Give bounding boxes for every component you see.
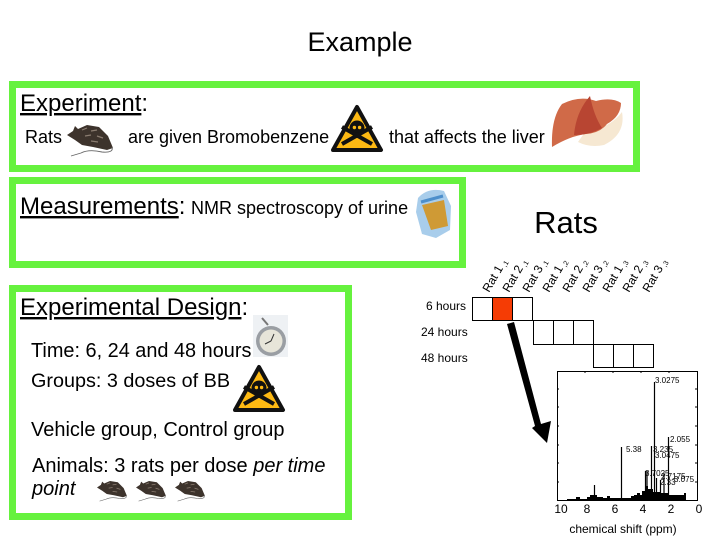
rat column labels: ,1 [541,260,551,270]
text: vehicle control: Vehicle group, Control group [31,419,284,441]
row labels: 24 hours [421,325,468,339]
peak labels: 5.38 [626,445,642,454]
x axis ticks: 10 [554,502,568,516]
text: affects the liver: that affects the liver [389,127,545,147]
text: time: Time: 6, 24 and 48 hours [31,340,251,362]
heading: experimental design: Experimental Design: [20,294,248,321]
peak labels: 2.33 [660,478,676,487]
icon: urine glass [416,190,451,238]
icon: liver [552,96,623,147]
rat column labels: Rat 3 [519,263,546,294]
icon: hazard [333,107,381,150]
peak labels [626,376,695,487]
rat column labels: Rat 3 [579,263,606,294]
sample grid [472,298,654,368]
text: rats: Rats [25,127,62,147]
heading: rats: Rats [534,205,598,240]
spectrum peaks [594,382,668,500]
rat column labels: Rat 2 [559,263,586,294]
x axis label: chemical shift (ppm) [569,522,677,536]
x axis ticks: 0 [696,502,703,516]
rat column labels: Rat 1 [599,263,626,294]
panel: experiment [12,84,636,168]
rat column labels [479,256,671,295]
x axis ticks: 6 [612,502,619,516]
peak labels: 2.7175 [661,472,686,481]
peak labels: 3.7025 [645,469,670,478]
panel: measurements [12,180,462,264]
rat column labels: Rat 2 [619,263,646,294]
rat column labels: Rat 1 [479,263,506,294]
title: Example [307,27,413,57]
heading: experiment: Experiment: [20,90,148,117]
rat column labels: ,2 [601,260,611,270]
peak labels: 3.0475 [655,451,680,460]
rat column labels: ,3 [641,260,651,270]
text: animals: Animals: 3 rats per dose per time [32,455,325,477]
rat column labels: ,3 [621,260,631,270]
rat column labels: ,2 [581,260,591,270]
peak labels: 2.055 [670,435,691,444]
icon: hazard small [235,367,283,410]
icon: rat [67,125,113,156]
rat column labels: ,1 [521,260,531,270]
peak labels: 3.235 [653,445,674,454]
x axis ticks [554,502,703,516]
peak labels: 3.075 [674,475,695,484]
text: nmr spectroscopy: NMR spectroscopy of urine [191,198,408,218]
rat column labels: Rat 1 [539,263,566,294]
x axis ticks: 4 [640,502,647,516]
rat column labels: Rat 3 [639,263,666,294]
text: point: point [31,478,77,500]
x axis ticks: 2 [668,502,675,516]
icon: stopwatch [253,315,288,357]
x axis ticks: 8 [584,502,591,516]
peak labels: 3.0275 [655,376,680,385]
rat column labels: ,1 [501,260,511,270]
heading: measurements: Measurements: [20,193,185,220]
row labels [421,299,468,365]
row labels: 48 hours [421,351,468,365]
rat column labels: ,3 [661,260,671,270]
nmr spectrum chart [554,371,703,536]
icon: three rats [97,481,205,501]
rat column labels: ,2 [561,260,571,270]
arrow [507,322,551,443]
text: are given bromobenzene: are given Bromobenzene [128,127,329,147]
text: groups: Groups: 3 doses of BB [31,370,230,392]
panel: experimental design [12,288,348,516]
row labels: 6 hours [426,299,466,313]
rat column labels: Rat 2 [499,263,526,294]
